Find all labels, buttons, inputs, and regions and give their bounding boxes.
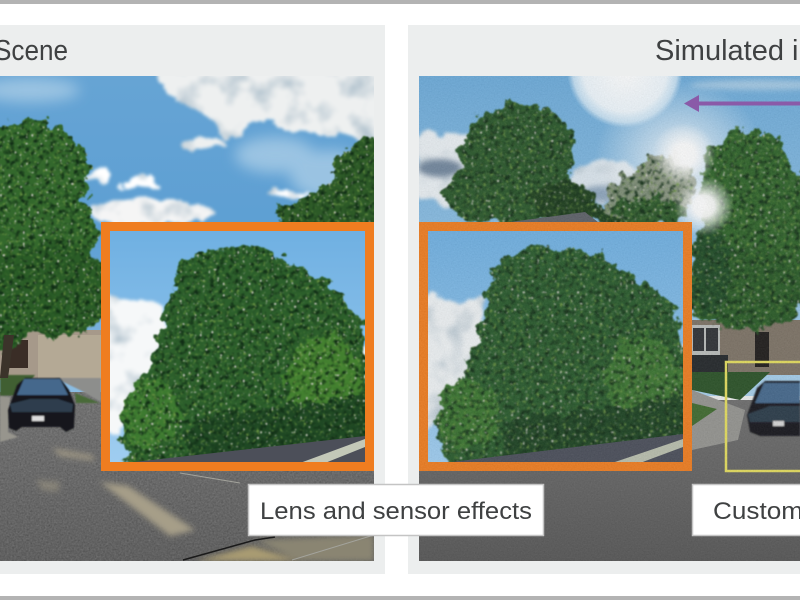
inset tree [117, 246, 372, 470]
photo: original scene [0, 60, 390, 562]
sensor noise [419, 76, 800, 561]
sidewalk [692, 390, 745, 450]
inset roof [443, 434, 683, 463]
inset: enlarged tree with orange frame [100, 226, 375, 470]
cloud shadows [418, 80, 800, 202]
label: lens and sensor effects: Lens and sensor effects [260, 498, 532, 525]
house roof [510, 212, 598, 222]
inset cloud [100, 296, 375, 430]
label: custom: Custom [713, 498, 800, 525]
sunlight patches on road [36, 448, 374, 561]
lens flare: large disc [568, 76, 682, 127]
tree: pale tree [604, 155, 694, 226]
clouds [410, 132, 650, 208]
inset cloud [420, 296, 693, 430]
arrow: flare pointer [684, 95, 800, 112]
bottom grey rule [0, 596, 800, 600]
tree: right [683, 128, 800, 330]
pale sky haze [0, 78, 370, 200]
grass [692, 372, 770, 400]
tree: right corner [274, 135, 374, 222]
house below right tree [692, 320, 800, 375]
road [419, 400, 800, 562]
label: lens and sensor effects [248, 484, 544, 536]
light glow in sky [602, 86, 752, 231]
crack [183, 537, 275, 560]
clouds [83, 76, 374, 224]
car [747, 381, 800, 436]
house [0, 330, 101, 380]
sun glare spots [654, 126, 715, 186]
label: custom [692, 484, 800, 536]
inset tree [435, 246, 690, 470]
grass and driveway [0, 375, 101, 442]
tree: left [0, 120, 110, 350]
photo: simulated sensor image [419, 76, 800, 561]
trunk [0, 335, 14, 378]
panel: simulated image [408, 12, 800, 574]
sidewalk line [180, 473, 374, 560]
inset: simulated tree with orange frame [420, 226, 693, 470]
car [8, 378, 75, 432]
road [0, 392, 374, 562]
yellow detection box [726, 362, 800, 471]
inset roof [125, 436, 365, 463]
tree: dark centre [444, 104, 652, 229]
top grey rule [0, 0, 800, 4]
panel: scene [0, 25, 390, 574]
